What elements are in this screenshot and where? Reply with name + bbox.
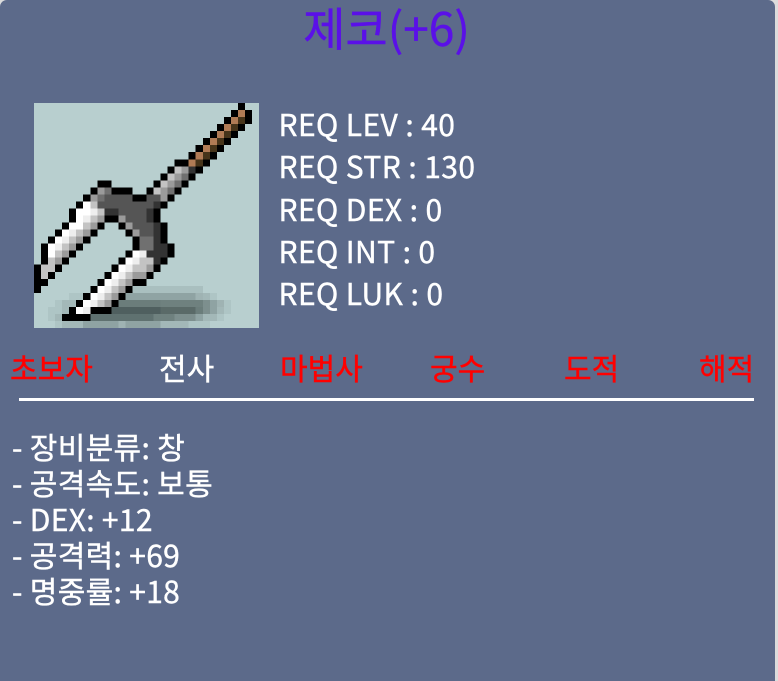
requirement: strength: REQ STR : 130 bbox=[278, 143, 475, 187]
icon: pixel-art polearm bbox=[34, 103, 259, 328]
job: mage: 마법사 bbox=[280, 345, 363, 389]
requirement: luck: REQ LUK : 0 bbox=[278, 270, 443, 314]
stat: attack speed: - 공격속도: 보통 bbox=[12, 460, 213, 504]
job: archer: 궁수 bbox=[430, 345, 485, 389]
item stats list bbox=[12, 424, 213, 612]
job: warrior: 전사 bbox=[159, 345, 214, 389]
job: thief: 도적 bbox=[564, 345, 619, 389]
requirement: dexterity: REQ DEX : 0 bbox=[278, 186, 443, 230]
divider bbox=[19, 398, 754, 401]
job class row bbox=[10, 345, 754, 389]
requirement: level: REQ LEV : 40 bbox=[278, 101, 455, 145]
stat: attack power: - 공격력: +69 bbox=[12, 532, 180, 576]
stat: accuracy: - 명중률: +18 bbox=[12, 568, 180, 612]
requirement: intelligence: REQ INT : 0 bbox=[278, 228, 435, 272]
requirements list bbox=[278, 101, 475, 314]
job: beginner: 초보자 bbox=[10, 345, 93, 389]
stat: dex bonus: - DEX: +12 bbox=[12, 496, 153, 540]
stat: equipment type: - 장비분류: 창 bbox=[12, 424, 185, 468]
job: pirate: 해적 bbox=[699, 345, 754, 389]
